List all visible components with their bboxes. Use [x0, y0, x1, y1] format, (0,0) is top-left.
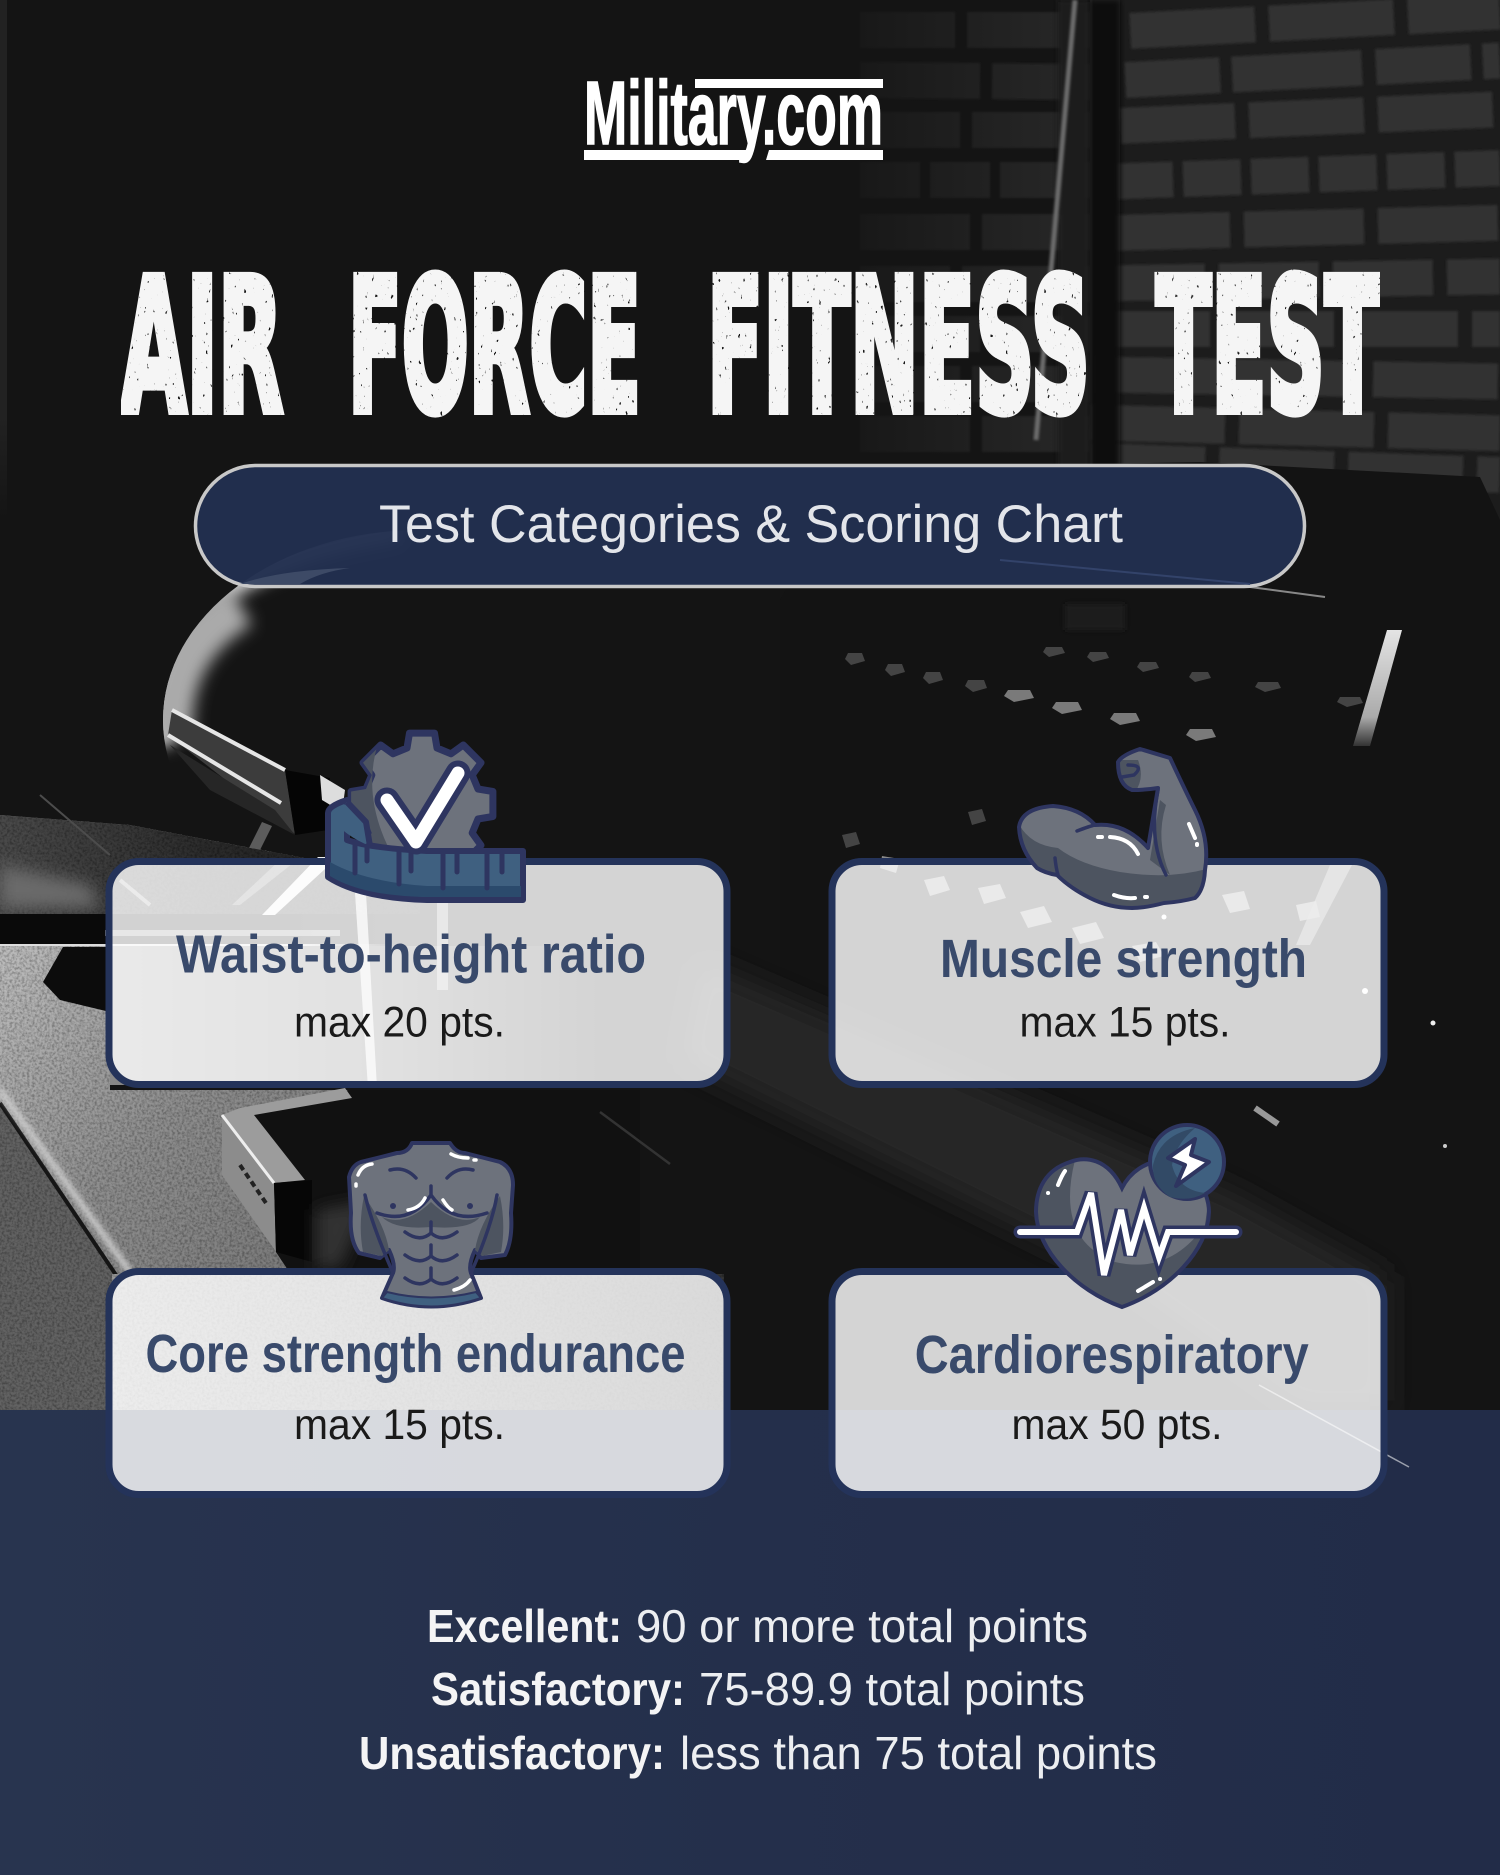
title: Air Force Fitness Test: FORCE — [348, 240, 641, 454]
unsatisfactory line: Unsatisfactory: — [359, 1727, 665, 1779]
panel: muscle strength — [832, 862, 1384, 1084]
panel: waist-to-height ratio — [109, 862, 727, 1084]
panel: muscle strength: max 15 pts. — [1020, 998, 1230, 1046]
subtitle pill — [196, 466, 1304, 586]
panel: cardiorespiratory — [832, 1272, 1384, 1494]
satisfactory line: Satisfactory: — [431, 1663, 685, 1715]
unsatisfactory line: less than 75 total points — [680, 1727, 1157, 1779]
title: Air Force Fitness Test — [121, 240, 1380, 454]
panel: core strength endurance: max 15 pts. — [294, 1401, 505, 1449]
panel: waist-to-height ratio: max 20 pts. — [294, 998, 505, 1046]
dumbbell rack silhouette — [780, 462, 1500, 1100]
icon: flexed arm — [1015, 749, 1210, 915]
floor wedge — [43, 947, 110, 1012]
navy bottom band — [0, 1410, 1500, 1875]
icon: tape measure and gear check — [328, 725, 523, 900]
unsatisfactory line — [359, 1727, 1157, 1779]
logo: Military.com — [584, 64, 883, 164]
panel: cardiorespiratory: Cardiorespiratory — [915, 1325, 1309, 1385]
panel: waist-to-height ratio: Waist-to-height ratio — [176, 924, 646, 984]
panel: core strength endurance: Core strength endurance — [146, 1324, 686, 1384]
bench — [168, 710, 295, 834]
floor: mat under card 1 — [100, 946, 600, 1085]
icon: torso — [349, 1143, 513, 1306]
exercise ball rim — [163, 586, 278, 757]
scoring text — [359, 1600, 1157, 1779]
title: Air Force Fitness Test: AIR — [121, 240, 283, 454]
floor: mat — [0, 946, 349, 1275]
panel: muscle strength: Muscle strength — [940, 929, 1307, 989]
card line reflection — [1259, 1385, 1409, 1467]
panel: core strength endurance — [109, 1272, 727, 1494]
logo: Military.com: Military.com — [584, 64, 883, 164]
excellent line: 90 or more total points — [636, 1600, 1088, 1652]
floor under card 3 — [105, 1270, 735, 1415]
wall bricks, faint middle section — [860, 30, 1090, 434]
satisfactory line: 75-89.9 total points — [699, 1663, 1085, 1715]
wall pipe highlight — [1036, 0, 1075, 440]
light streaks behind card 1 — [105, 857, 448, 1088]
wall bricks, right section — [1090, 0, 1500, 560]
floor: upper strip — [0, 815, 420, 914]
background: gym photo — [0, 0, 1500, 1415]
excellent line: Excellent: — [427, 1600, 622, 1652]
icon: heart with pulse — [1020, 1125, 1236, 1307]
panel: cardiorespiratory: max 50 pts. — [1012, 1401, 1222, 1449]
bench plate — [223, 1090, 640, 1273]
subtitle pill: Test Categories & Scoring Chart — [379, 495, 1123, 554]
dumbbells — [1004, 690, 1216, 741]
satisfactory line — [431, 1663, 1085, 1715]
excellent line — [427, 1600, 1088, 1652]
floor: lower-right sheen — [680, 960, 1387, 1410]
